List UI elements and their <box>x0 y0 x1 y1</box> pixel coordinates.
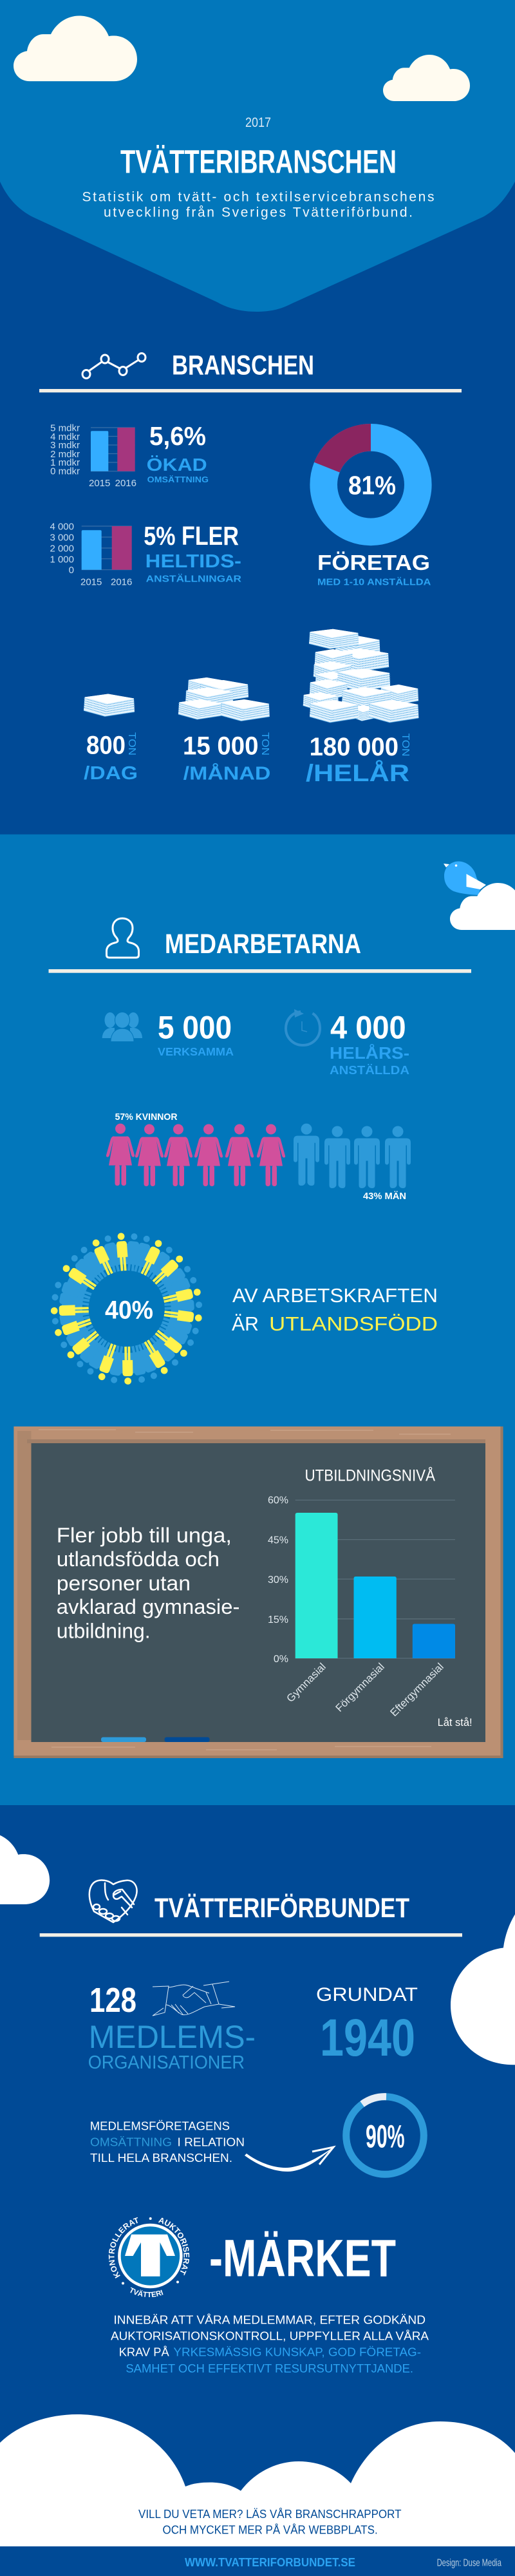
stat: 5 000 verksamma: 5 000 <box>158 1010 232 1046</box>
header banner shape <box>0 0 515 312</box>
stat: 5% fler heltidsanställningar <box>144 521 241 584</box>
bar chart: omsättning: 5 mdkr <box>50 422 80 433</box>
stat: 5% fler heltidsanställningar: ANSTÄLLNINGAR <box>146 573 241 584</box>
bar chart: omsättning <box>50 422 136 489</box>
stat: 5,6% ökad omsättning <box>147 421 209 484</box>
logo: t-märket seal: KONTROLLERAT <box>108 2217 138 2278</box>
text: medlemsföretagens omsättning: I RELATION <box>178 2135 245 2148</box>
text: chalkboard message: utlandsfödda och <box>57 1548 220 1571</box>
bar chart: omsättning: 3 mdkr <box>50 440 80 451</box>
bar chart: utbildningsnivå: Gymnasial <box>285 1661 328 1705</box>
text: märket description: KRAV PÅ <box>119 2345 169 2359</box>
bar chart: utbildningsnivå: 30% <box>268 1575 288 1586</box>
stat: 180 000 ton per helår: 180 000 <box>310 733 398 761</box>
text: märket description: SAMHET OCH EFFEKTIVT RESURSUTNYTTJANDE. <box>126 2362 413 2375</box>
label: 43% män: 43% MÄN <box>363 1191 406 1202</box>
stat: 128 medlemsorganisationer: MEDLEMS- <box>89 2019 256 2055</box>
bar chart: utbildningsnivå: Förgymnasial <box>333 1661 387 1714</box>
stat: 4 000 helårsanställda: 4 000 <box>330 1010 406 1046</box>
icon: person outline <box>107 918 139 958</box>
logo: t-märket seal: AUKTORISERAT <box>158 2218 189 2276</box>
panel: chalkboard <box>14 1426 503 1758</box>
stat: 128 medlemsorganisationer <box>88 1981 256 2073</box>
icon: laundry pile large <box>303 629 418 723</box>
stat: 5,6% ökad omsättning: ÖKAD <box>147 455 207 475</box>
icon: laundry pile medium <box>178 677 270 721</box>
bar chart: utbildningsnivå: Eftergymnasial <box>388 1661 446 1719</box>
donut chart: 90% <box>346 2097 424 2174</box>
bar chart: anställningar: 2015 <box>80 576 102 587</box>
icon: cloud small <box>383 55 470 101</box>
icon: cloud left edge <box>0 1832 50 1904</box>
heading: medarbetarna: MEDARBETARNA <box>165 929 361 960</box>
logo: t-märket seal <box>108 2217 189 2297</box>
stat: 5,6% ökad omsättning: 5,6% <box>149 421 206 451</box>
stat: 5,6% ökad omsättning: OMSÄTTNING <box>147 475 209 484</box>
title: TVÄTTERIBRANSCHEN <box>120 144 397 180</box>
text: call to action <box>138 2507 402 2537</box>
bar chart: omsättning: 4 mdkr <box>50 431 80 442</box>
stat: 800 ton per dag: TON <box>126 732 137 755</box>
bar chart: anställningar <box>50 522 132 587</box>
text: märket description: AUKTORISATIONSKONTROLL, UPPFYLLER ALLA VÅRA <box>111 2329 429 2342</box>
heading: branschen: BRANSCHEN <box>172 351 314 381</box>
logo: t-märket seal: TVÄTTERI <box>130 2287 164 2297</box>
heading: tvätteriförbundet: TVÄTTERIFÖRBUNDET <box>154 1893 409 1924</box>
bar chart: anställningar: 0 <box>69 565 74 576</box>
text: märket description: YRKESMÄSSIG KUNSKAP, GOD FÖRETAG- <box>173 2345 421 2359</box>
bar chart: utbildningsnivå: 0% <box>274 1654 288 1665</box>
icon: handshake heart <box>89 1880 137 1922</box>
subtitle: Statistik om tvätt- och textilservicebranschens <box>82 190 435 205</box>
stat: 15 000 ton per månad: 15 000 <box>183 732 259 761</box>
text: medlemsföretagens omsättning <box>90 2119 245 2164</box>
text: medlemsföretagens omsättning: MEDLEMSFÖRETAGENS <box>90 2119 230 2133</box>
bar chart: omsättning: 1 mdkr <box>50 457 80 468</box>
stat: 800 ton per dag: 800 <box>86 732 126 760</box>
text: chalkboard message: Fler jobb till unga, <box>57 1524 232 1547</box>
icon: clock with arrow <box>286 1009 320 1045</box>
text: av arbetskraften är utlandsfödd <box>232 1284 438 1335</box>
label: företag <box>317 551 431 587</box>
icon: bird on cloud <box>444 862 515 930</box>
label: företag: MED 1-10 ANSTÄLLDA <box>317 576 431 587</box>
stat: grundat 1940 <box>316 1984 418 2067</box>
stat: grundat 1940: GRUNDAT <box>316 1984 418 2005</box>
note: låt stå: Låt stå! <box>438 1716 473 1728</box>
text: av arbetskraften är utlandsfödd: UTLANDSFÖDD <box>269 1312 438 1335</box>
stat: 5% fler heltidsanställningar: HELTIDS- <box>145 551 241 572</box>
chalk: dark blue <box>165 1738 210 1742</box>
subtitle <box>82 190 435 220</box>
bar chart: anställningar: 1 000 <box>50 554 74 565</box>
heading: -märket: -MÄRKET <box>209 2230 396 2288</box>
text: märket description <box>111 2313 429 2375</box>
year: 2017 <box>245 115 271 130</box>
stat: 128 medlemsorganisationer: ORGANISATIONER <box>88 2052 245 2073</box>
arrow <box>245 2147 333 2172</box>
stat: 15 000 ton per månad <box>183 732 270 784</box>
stat: 4 000 helårsanställda: ANSTÄLLDA <box>330 1063 409 1077</box>
bar chart: utbildningsnivå: 60% <box>268 1495 288 1506</box>
icon: group of people <box>102 1012 142 1042</box>
text: chalkboard message: avklarad gymnasie- <box>57 1595 239 1618</box>
stat: 800 ton per dag: /DAG <box>84 763 138 784</box>
bar chart: utbildningsnivå <box>268 1495 455 1719</box>
text: medlemsföretagens omsättning: OMSÄTTNING <box>90 2135 172 2148</box>
bar chart: omsättning: 2015 <box>89 478 110 489</box>
pictogram: ring of workers <box>51 1233 203 1385</box>
pictogram: men <box>294 1124 411 1188</box>
text: chalkboard message <box>57 1524 239 1643</box>
stat: 180 000 ton per helår <box>306 733 411 786</box>
stat: 5% fler heltidsanställningar: 5% FLER <box>144 521 239 551</box>
bar chart: anställningar: 4 000 <box>50 522 74 533</box>
stat: 180 000 ton per helår: /HELÅR <box>306 759 409 786</box>
text: chalkboard message: personer utan <box>57 1571 191 1595</box>
donut chart: 81%: 81% <box>348 470 396 500</box>
chalk: light blue <box>101 1738 146 1742</box>
stat: 4 000 helårsanställda <box>330 1010 409 1077</box>
donut chart: 90%: 90% <box>366 2118 405 2154</box>
stat: 40%: 40% <box>105 1296 153 1324</box>
icon: laundry pile small <box>84 694 135 716</box>
subtitle: utveckling från Sveriges Tvätteriförbund. <box>104 205 413 220</box>
stat: 128 medlemsorganisationer: 128 <box>89 1981 136 2020</box>
stat: 5 000 verksamma: VERKSAMMA <box>158 1045 234 1058</box>
stat: 800 ton per dag <box>84 732 138 784</box>
bar chart: utbildningsnivå: 45% <box>268 1535 288 1546</box>
icon: sketched handshake <box>153 1982 235 2016</box>
text: call to action: VILL DU VETA MER? LÄS VÅR BRANSCHRAPPORT <box>138 2507 402 2521</box>
label: 57% kvinnor: 57% KVINNOR <box>115 1112 178 1122</box>
stat: 15 000 ton per månad: /MÅNAD <box>183 763 270 784</box>
bar chart: anställningar: 2 000 <box>50 543 74 554</box>
bar chart: omsättning: 0 mdkr <box>50 466 80 477</box>
stat: 180 000 ton per helår: TON <box>400 734 411 757</box>
icon: line chart <box>82 353 145 379</box>
text: av arbetskraften är utlandsfödd: ÄR <box>232 1312 259 1335</box>
stat: grundat 1940: 1940 <box>320 2009 415 2067</box>
icon: cloud right edge <box>451 1811 515 2065</box>
icon: cloud large <box>14 15 137 81</box>
panel: medarbetarna background <box>0 835 515 1805</box>
chart heading: utbildningsnivå: UTBILDNINGSNIVÅ <box>305 1466 435 1485</box>
bar chart: anställningar: 2016 <box>111 576 132 587</box>
bar chart: omsättning: 2 mdkr <box>50 449 80 460</box>
text: chalkboard message: utbildning. <box>57 1620 151 1643</box>
text: call to action: OCH MYCKET MER PÅ VÅR WEBBPLATS. <box>162 2523 378 2537</box>
footer cloud <box>0 2414 515 2546</box>
text: märket description: INNEBÄR ATT VÅRA MEDLEMMAR, EFTER GODKÄND <box>113 2313 426 2327</box>
pictogram: women <box>106 1124 285 1186</box>
label: företag: FÖRETAG <box>317 551 430 574</box>
text: av arbetskraften är utlandsfödd: AV ARBETSKRAFTEN <box>232 1284 438 1307</box>
stat: 4 000 helårsanställda: HELÅRS- <box>330 1043 409 1063</box>
link: website: WWW.TVATTERIFORBUNDET.SE <box>185 2555 355 2569</box>
stat: 15 000 ton per månad: TON <box>259 732 270 755</box>
bar chart: anställningar: 3 000 <box>50 532 74 543</box>
donut chart: 81% <box>314 424 418 532</box>
bar chart: omsättning: 2016 <box>115 478 136 489</box>
text: medlemsföretagens omsättning: TILL HELA BRANSCHEN. <box>90 2151 232 2164</box>
bar chart: utbildningsnivå: 15% <box>268 1615 288 1625</box>
